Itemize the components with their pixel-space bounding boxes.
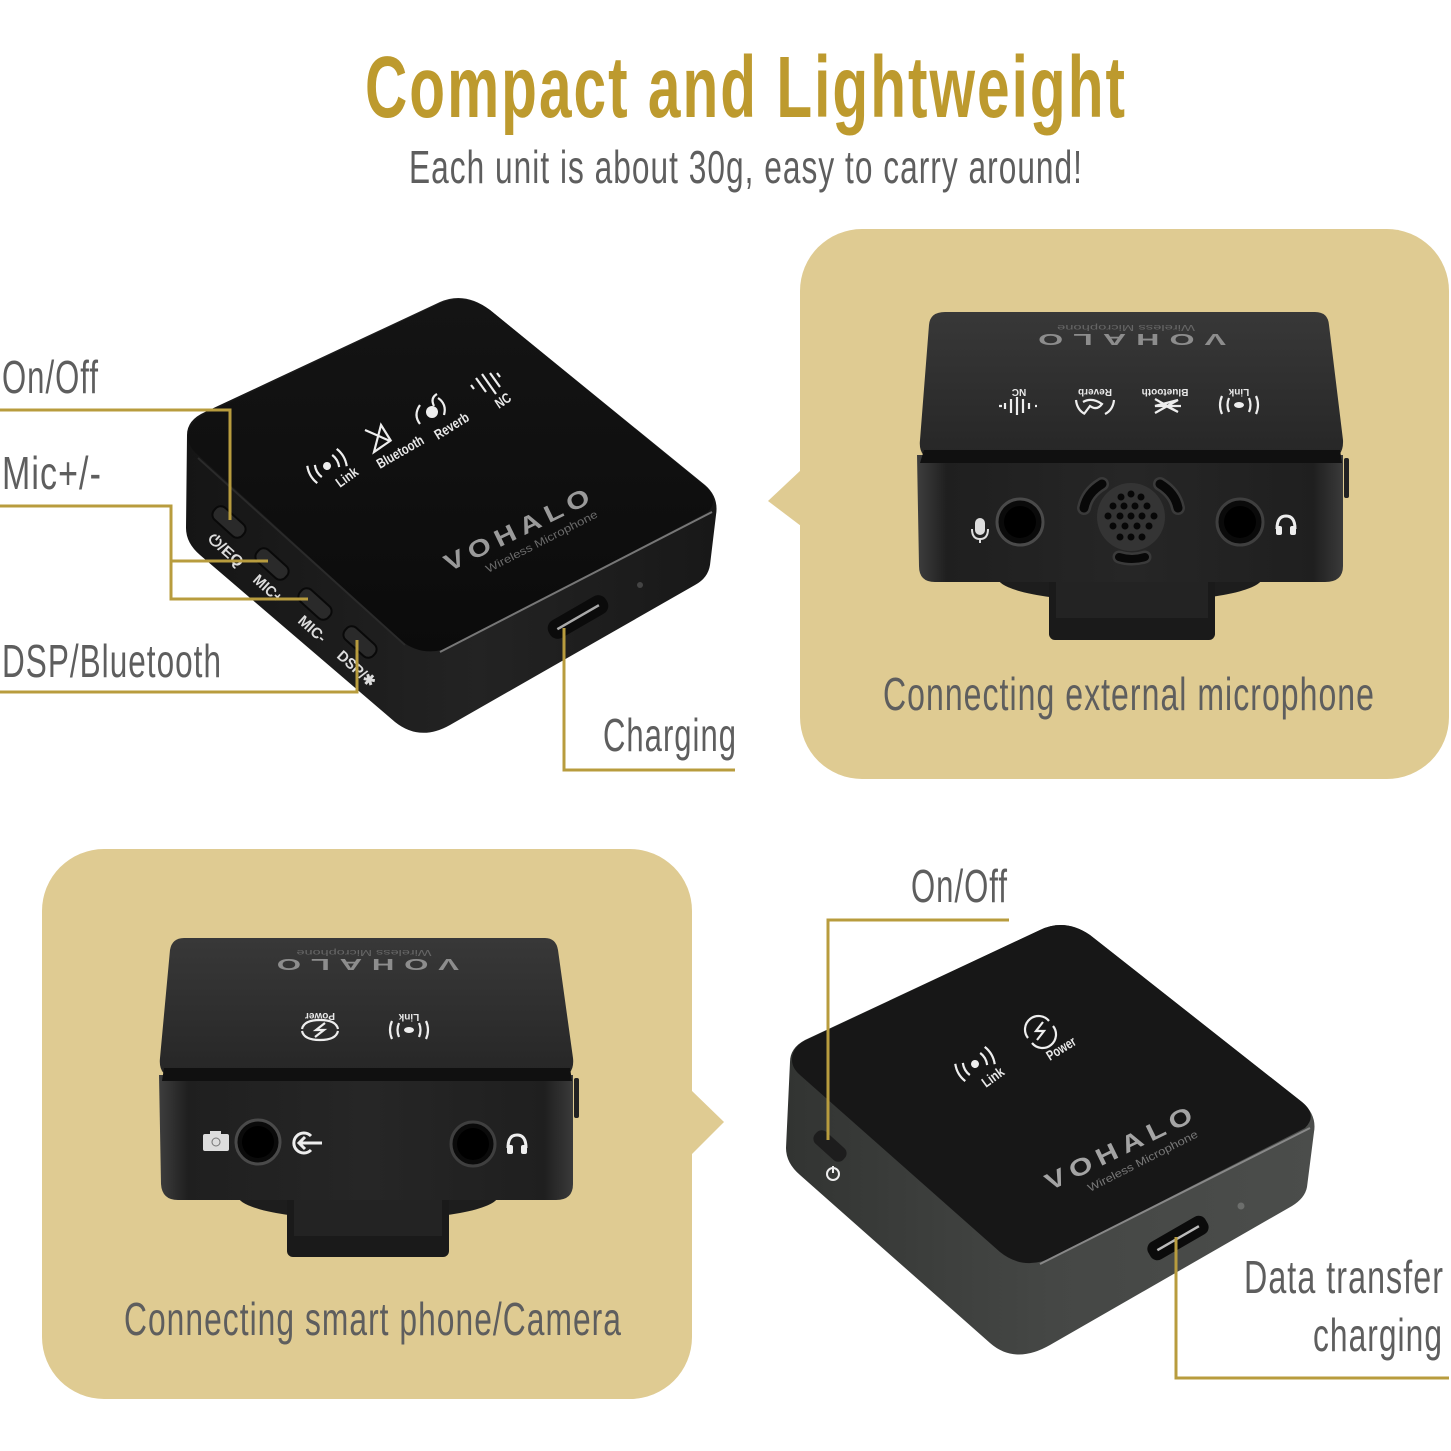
LED	[637, 582, 643, 588]
button labels: ⏻/EQ	[204, 530, 247, 571]
status icons: Power	[305, 1010, 335, 1021]
panel: connecting smart phone or camera	[42, 849, 724, 1399]
status icons: Power	[1043, 1033, 1079, 1064]
microphone grille	[1084, 483, 1178, 559]
button labels	[204, 530, 379, 691]
button labels: MIC-	[294, 612, 329, 646]
status icons: Reverb	[1078, 386, 1112, 397]
status icons: Reverb	[431, 409, 472, 443]
status icons: Link	[1228, 386, 1249, 397]
logo tagline: Wireless Microphone	[1086, 1129, 1200, 1195]
device: receiver front view	[917, 312, 1349, 640]
icon: headphones	[1276, 516, 1296, 535]
mic jack	[997, 499, 1043, 545]
button labels: MIC+	[249, 571, 286, 607]
icon: headphones	[507, 1135, 527, 1154]
logo: VOHALO	[440, 481, 600, 577]
headphone jack	[1217, 499, 1263, 545]
status icons: Bluetooth	[374, 432, 427, 472]
side buttons	[210, 503, 379, 661]
caption: Connecting smart phone/Camera	[124, 1293, 622, 1345]
device: receiver angled view	[186, 298, 717, 733]
status icons	[306, 373, 514, 490]
status icons	[954, 1016, 1079, 1090]
status icons	[302, 1010, 428, 1040]
logo: VOHALO	[267, 955, 459, 972]
side button	[811, 1127, 849, 1165]
device: transmitter front view	[159, 938, 579, 1257]
USB port	[1144, 1213, 1212, 1263]
logo tagline: Wireless Microphone	[484, 509, 600, 576]
logo	[267, 948, 459, 972]
button labels: DSP/✱	[333, 647, 379, 691]
logo: VOHALO	[1041, 1099, 1203, 1196]
callout: charging: Charging	[603, 709, 737, 761]
logo: Wireless Microphone	[1056, 323, 1195, 332]
icon: input	[294, 1133, 322, 1153]
subtitle: Each unit is about 30g, easy to carry around!	[409, 141, 1083, 193]
status icons: NC	[492, 389, 514, 411]
logo	[1028, 323, 1226, 347]
device: transmitter angled view	[786, 925, 1314, 1355]
status icons: Link	[978, 1063, 1007, 1090]
callout: data transfer charging	[1244, 1251, 1444, 1361]
USB port	[544, 592, 612, 642]
logo: VOHALO	[1028, 330, 1226, 347]
icon: camera	[203, 1131, 229, 1151]
callout: on/off top: On/Off	[2, 351, 99, 403]
callout: on/off bottom: On/Off	[911, 860, 1008, 912]
callout: DSP: DSP/Bluetooth	[2, 635, 222, 687]
logo: Wireless Microphone	[296, 948, 432, 957]
panel: connecting external microphone	[768, 229, 1449, 779]
status icons	[999, 386, 1258, 415]
LED	[1238, 1202, 1244, 1210]
callout lines	[0, 410, 1449, 1378]
callout: mic: Mic+/-	[2, 447, 102, 499]
status icons: Link	[398, 1011, 419, 1022]
status icons: NC	[1012, 386, 1026, 397]
status icons: Bluetooth	[1142, 386, 1188, 397]
headphone jack	[451, 1122, 495, 1166]
icon: microphone	[972, 518, 988, 543]
icon: power	[827, 1166, 839, 1180]
status icons: Link	[332, 463, 361, 490]
camera jack	[236, 1120, 280, 1164]
